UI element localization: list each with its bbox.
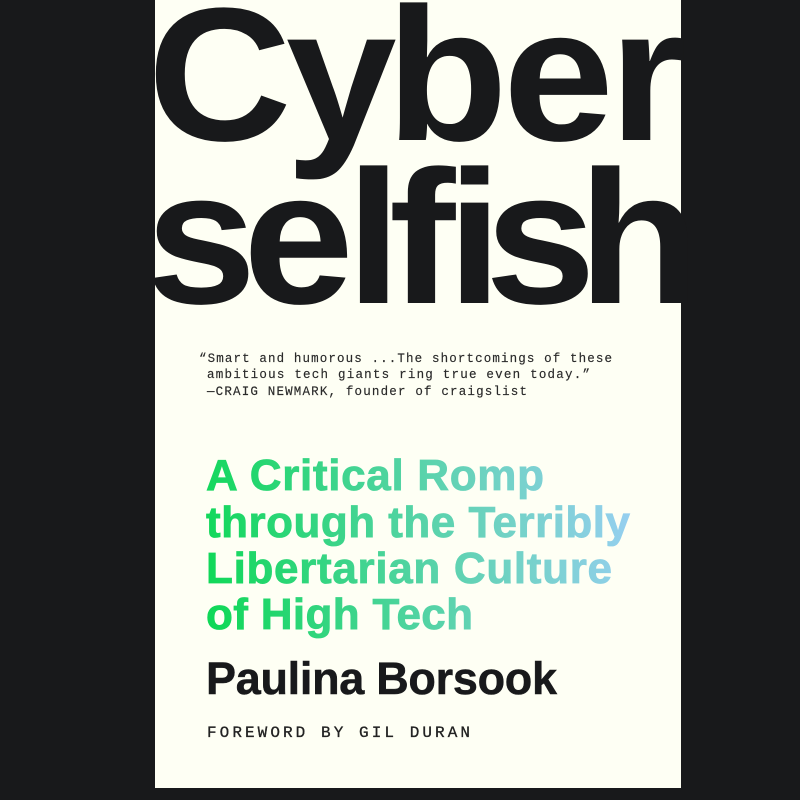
- subtitle line 2: through the Terribly: [206, 498, 631, 547]
- quote attribution: —CRAIG NEWMARK, founder of craigslist: [206, 385, 527, 399]
- quote line 1: “Smart and humorous ...The shortcomings of these: [199, 352, 612, 366]
- author name: Paulina Borsook: [206, 653, 558, 704]
- subtitle line 1: A Critical Romp: [206, 451, 544, 500]
- foreword credit: FOREWORD BY GIL DURAN: [207, 724, 470, 742]
- quote line 2: ambitious tech giants ring true even today.”: [207, 368, 590, 382]
- endorsement quote: [199, 352, 612, 399]
- subtitle line 3: Libertarian Culture: [206, 544, 612, 593]
- subtitle line 4: of High Tech: [206, 590, 473, 639]
- title: Cyber selfish: [146, 0, 700, 344]
- cover panel: [155, 0, 681, 788]
- subtitle: [206, 451, 631, 639]
- title word: selfish: selfish: [146, 132, 700, 344]
